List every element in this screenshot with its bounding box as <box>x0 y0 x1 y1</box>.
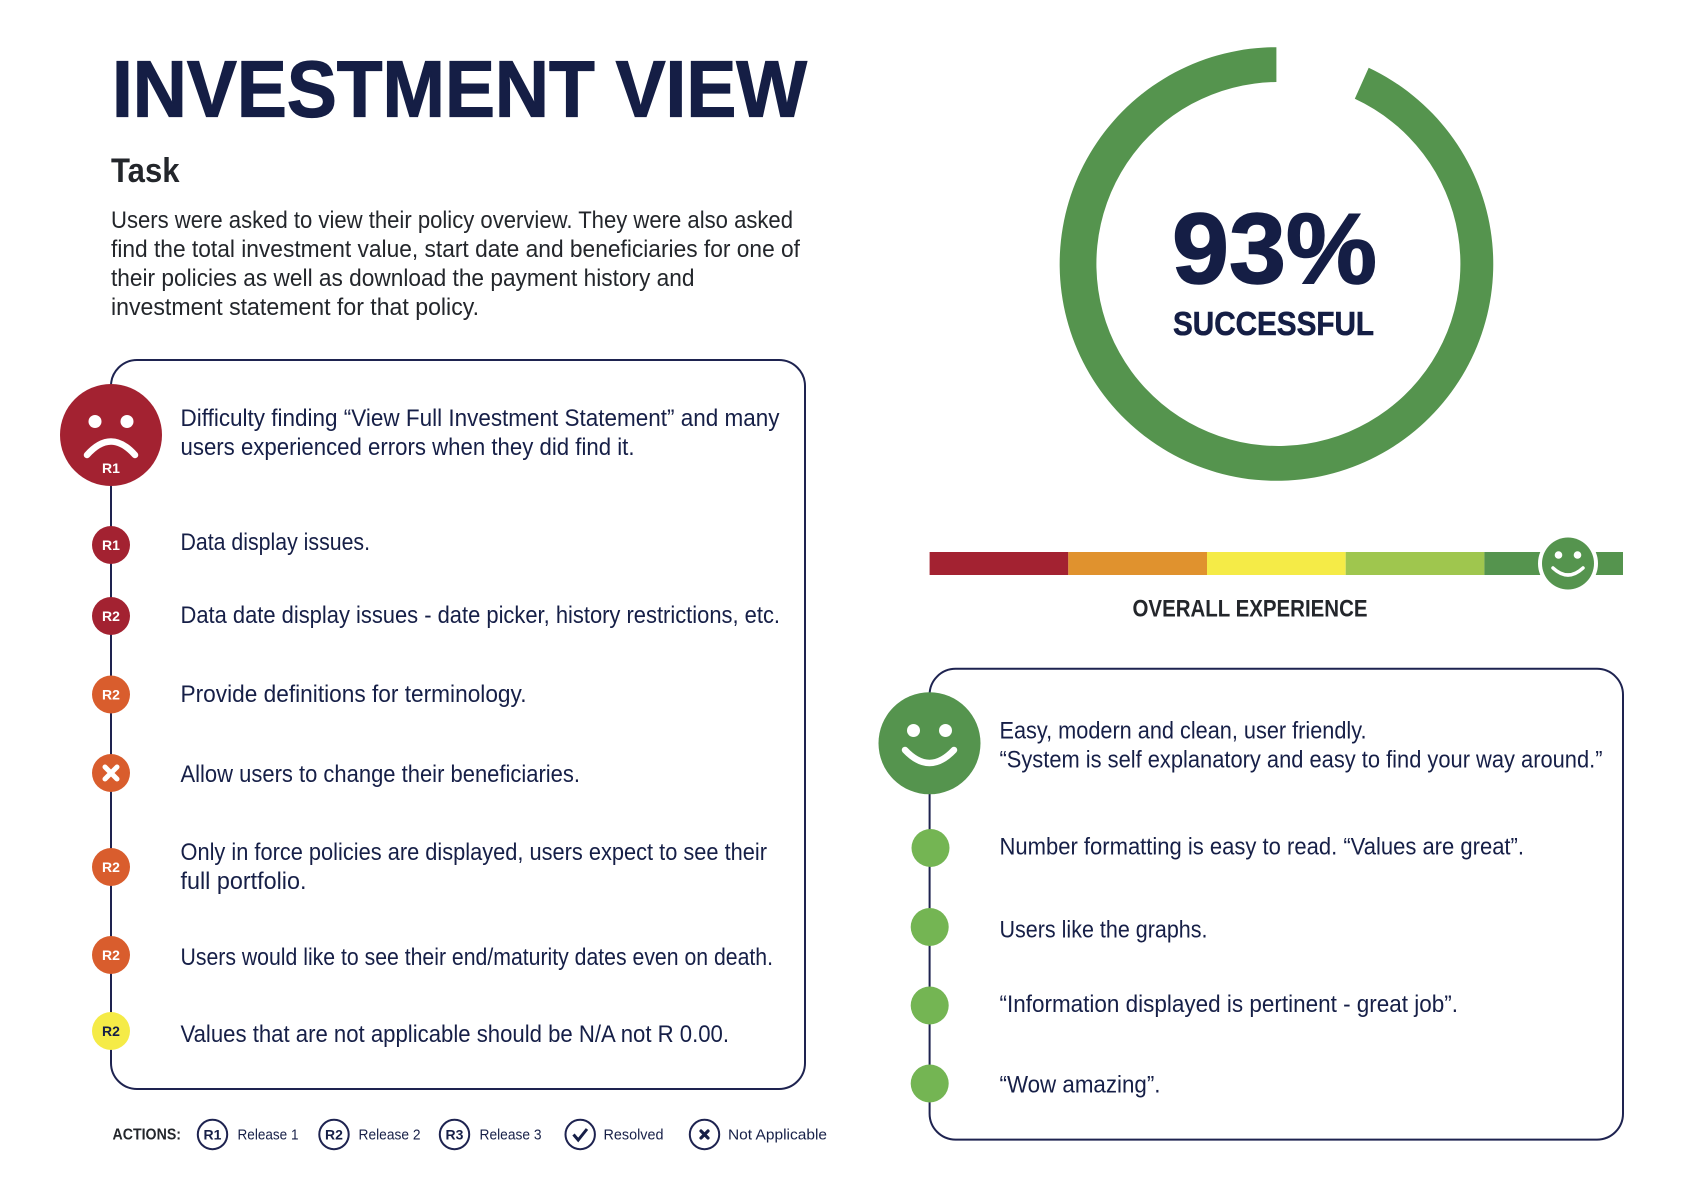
icon: sad face R1 <box>60 384 162 486</box>
legend: release 1: Release 1 <box>238 1126 298 1144</box>
issue: not applicable values: Values that are not applicable should be N/A not R 0.00. <box>180 1021 729 1048</box>
comment: easy modern clean <box>1000 718 1602 774</box>
panel outline <box>930 669 1623 1140</box>
comment: number formatting: Number formatting is easy to read. “Values are great”. <box>1000 834 1524 860</box>
issue: data date display: Data date display issues - date picker, history restrictions, etc. <box>180 602 780 629</box>
badge: R2 <box>92 597 130 635</box>
legend: release 2 <box>319 1120 420 1149</box>
comment: easy modern clean: Easy, modern and clean, user friendly. <box>1000 718 1366 744</box>
comment: pertinent: “Information displayed is pertinent - great job”. <box>1000 991 1458 1018</box>
issue: in force policies: full portfolio. <box>180 868 306 895</box>
issue: beneficiaries: Allow users to change their beneficiaries. <box>180 761 580 788</box>
panel: issues <box>60 360 805 1089</box>
rating bar: overall experience <box>930 534 1623 622</box>
legend: resolved: Resolved <box>604 1126 664 1144</box>
badge: R2 <box>92 848 130 886</box>
badge: R2 <box>92 1012 130 1050</box>
legend: actions <box>112 1120 827 1149</box>
title: INVESTMENT VIEW <box>112 44 807 134</box>
issue: investment statement <box>180 405 780 461</box>
legend: not applicable <box>690 1120 827 1149</box>
legend: release 1: R1 <box>204 1126 222 1142</box>
issue: in force policies <box>180 839 767 895</box>
donut chart: 93% <box>1060 47 1493 481</box>
issue: definitions: Provide definitions for terminology. <box>180 681 526 708</box>
badge: R2 <box>92 676 130 714</box>
comment: wow: “Wow amazing”. <box>1000 1072 1160 1098</box>
legend: not applicable: Not Applicable <box>728 1126 827 1144</box>
legend: release 3: Release 3 <box>480 1126 542 1144</box>
donut ring <box>1060 47 1493 481</box>
bullet <box>912 829 950 867</box>
badge: not applicable <box>92 754 130 792</box>
icon: smile marker <box>1538 534 1598 594</box>
issue: investment statement: Difficulty finding “View Full Investment Statement” and many <box>180 405 780 432</box>
issue: maturity dates: Users would like to see their end/maturity dates even on death. <box>180 944 773 971</box>
panel: positives <box>878 669 1623 1140</box>
badge: R2: R2 <box>102 608 120 624</box>
task description <box>111 207 800 321</box>
legend: release 2: R2 <box>325 1126 343 1142</box>
bullet <box>911 1064 949 1102</box>
badge: R2: R2 <box>102 686 120 702</box>
bullet <box>911 908 949 946</box>
label: successful: SUCCESSFUL <box>1173 305 1374 342</box>
big number: 93% <box>1172 193 1377 305</box>
legend: release 1 <box>198 1120 298 1149</box>
issue: in force policies: Only in force policies are displayed, users expect to see their <box>180 839 767 866</box>
issue: investment statement: users experienced errors when they did find it. <box>180 434 634 461</box>
task description: Users were asked to view their policy overview. They were also asked <box>111 207 793 234</box>
panel outline <box>111 360 805 1089</box>
comment: easy modern clean: “System is self explanatory and easy to find your way around.” <box>1000 746 1602 774</box>
badge: R2: R2 <box>102 1023 120 1039</box>
badge: R1: R1 <box>102 537 120 553</box>
icon: sad face R1: R1 <box>102 460 120 476</box>
badge: R2 <box>92 936 130 974</box>
bullet <box>911 986 949 1024</box>
comment: graphs: Users like the graphs. <box>1000 916 1208 944</box>
legend: resolved <box>566 1120 664 1149</box>
badge: R1 <box>92 526 130 564</box>
legend: release 3: R3 <box>446 1126 464 1142</box>
task description: find the total investment value, start date and beneficiaries for one of <box>111 236 800 263</box>
task description: their policies as well as download the payment history and <box>111 265 694 292</box>
icon: big smile <box>878 692 980 794</box>
label: overall experience: OVERALL EXPERIENCE <box>1132 596 1368 622</box>
task description: investment statement for that policy. <box>111 294 479 321</box>
legend: release 2: Release 2 <box>358 1126 420 1144</box>
badge: R2: R2 <box>102 859 120 875</box>
legend: release 3 <box>440 1120 542 1149</box>
heading: task: Task <box>111 152 180 190</box>
rating scale <box>930 552 1623 575</box>
badge: R2: R2 <box>102 947 120 963</box>
issue: data display: Data display issues. <box>180 529 370 556</box>
legend title: ACTIONS: <box>112 1126 181 1144</box>
